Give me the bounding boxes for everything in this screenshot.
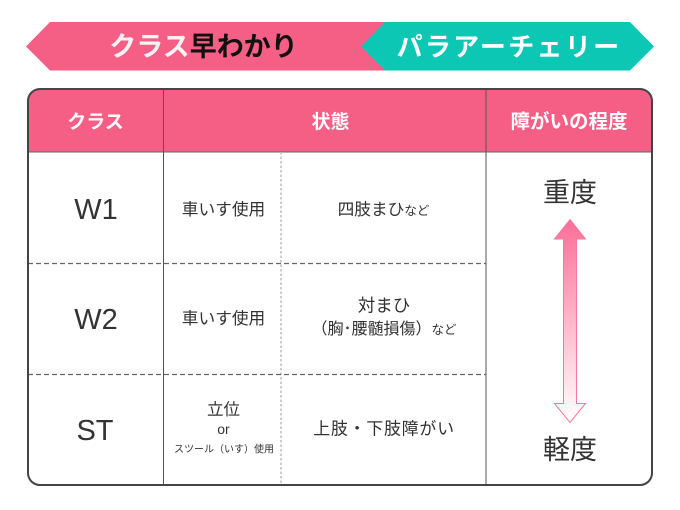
row W1 detail: 四肢まひなど — [338, 200, 430, 219]
row ST state — [174, 400, 274, 456]
row ST state: 立位 — [207, 400, 240, 419]
row ST class: ST — [76, 415, 114, 447]
row W2 detail: 対まひ — [358, 296, 410, 316]
row ST state: or — [217, 421, 230, 437]
banner: パラアーチェリー — [361, 22, 654, 70]
header: 状態: 状態 — [311, 110, 350, 133]
header: クラス: クラス — [67, 111, 124, 133]
table border — [28, 89, 652, 485]
grid lines — [28, 89, 652, 485]
banner label: パラアーチェリー — [397, 32, 621, 62]
banner: クラス早わかり — [26, 22, 390, 70]
row W1 state: 車いす使用 — [182, 200, 265, 219]
row W1 class: W1 — [74, 194, 118, 226]
severity arrow — [554, 220, 586, 422]
row ST state: スツール（いす）使用 — [174, 442, 274, 456]
severity bottom label: 軽度 — [543, 435, 597, 465]
banner title: クラス早わかり — [109, 32, 298, 62]
severity top label: 重度 — [543, 178, 597, 208]
header: 障がいの程度: 障がいの程度 — [510, 110, 628, 133]
table header background — [28, 89, 652, 152]
row W2 detail: （胸･腰髄損傷）など — [311, 320, 457, 338]
table — [28, 89, 652, 485]
row ST detail: 上肢・下肢障がい — [313, 420, 455, 438]
row W2 state: 車いす使用 — [182, 309, 265, 328]
row W2 class: W2 — [74, 304, 118, 336]
row W2 detail — [311, 296, 457, 338]
